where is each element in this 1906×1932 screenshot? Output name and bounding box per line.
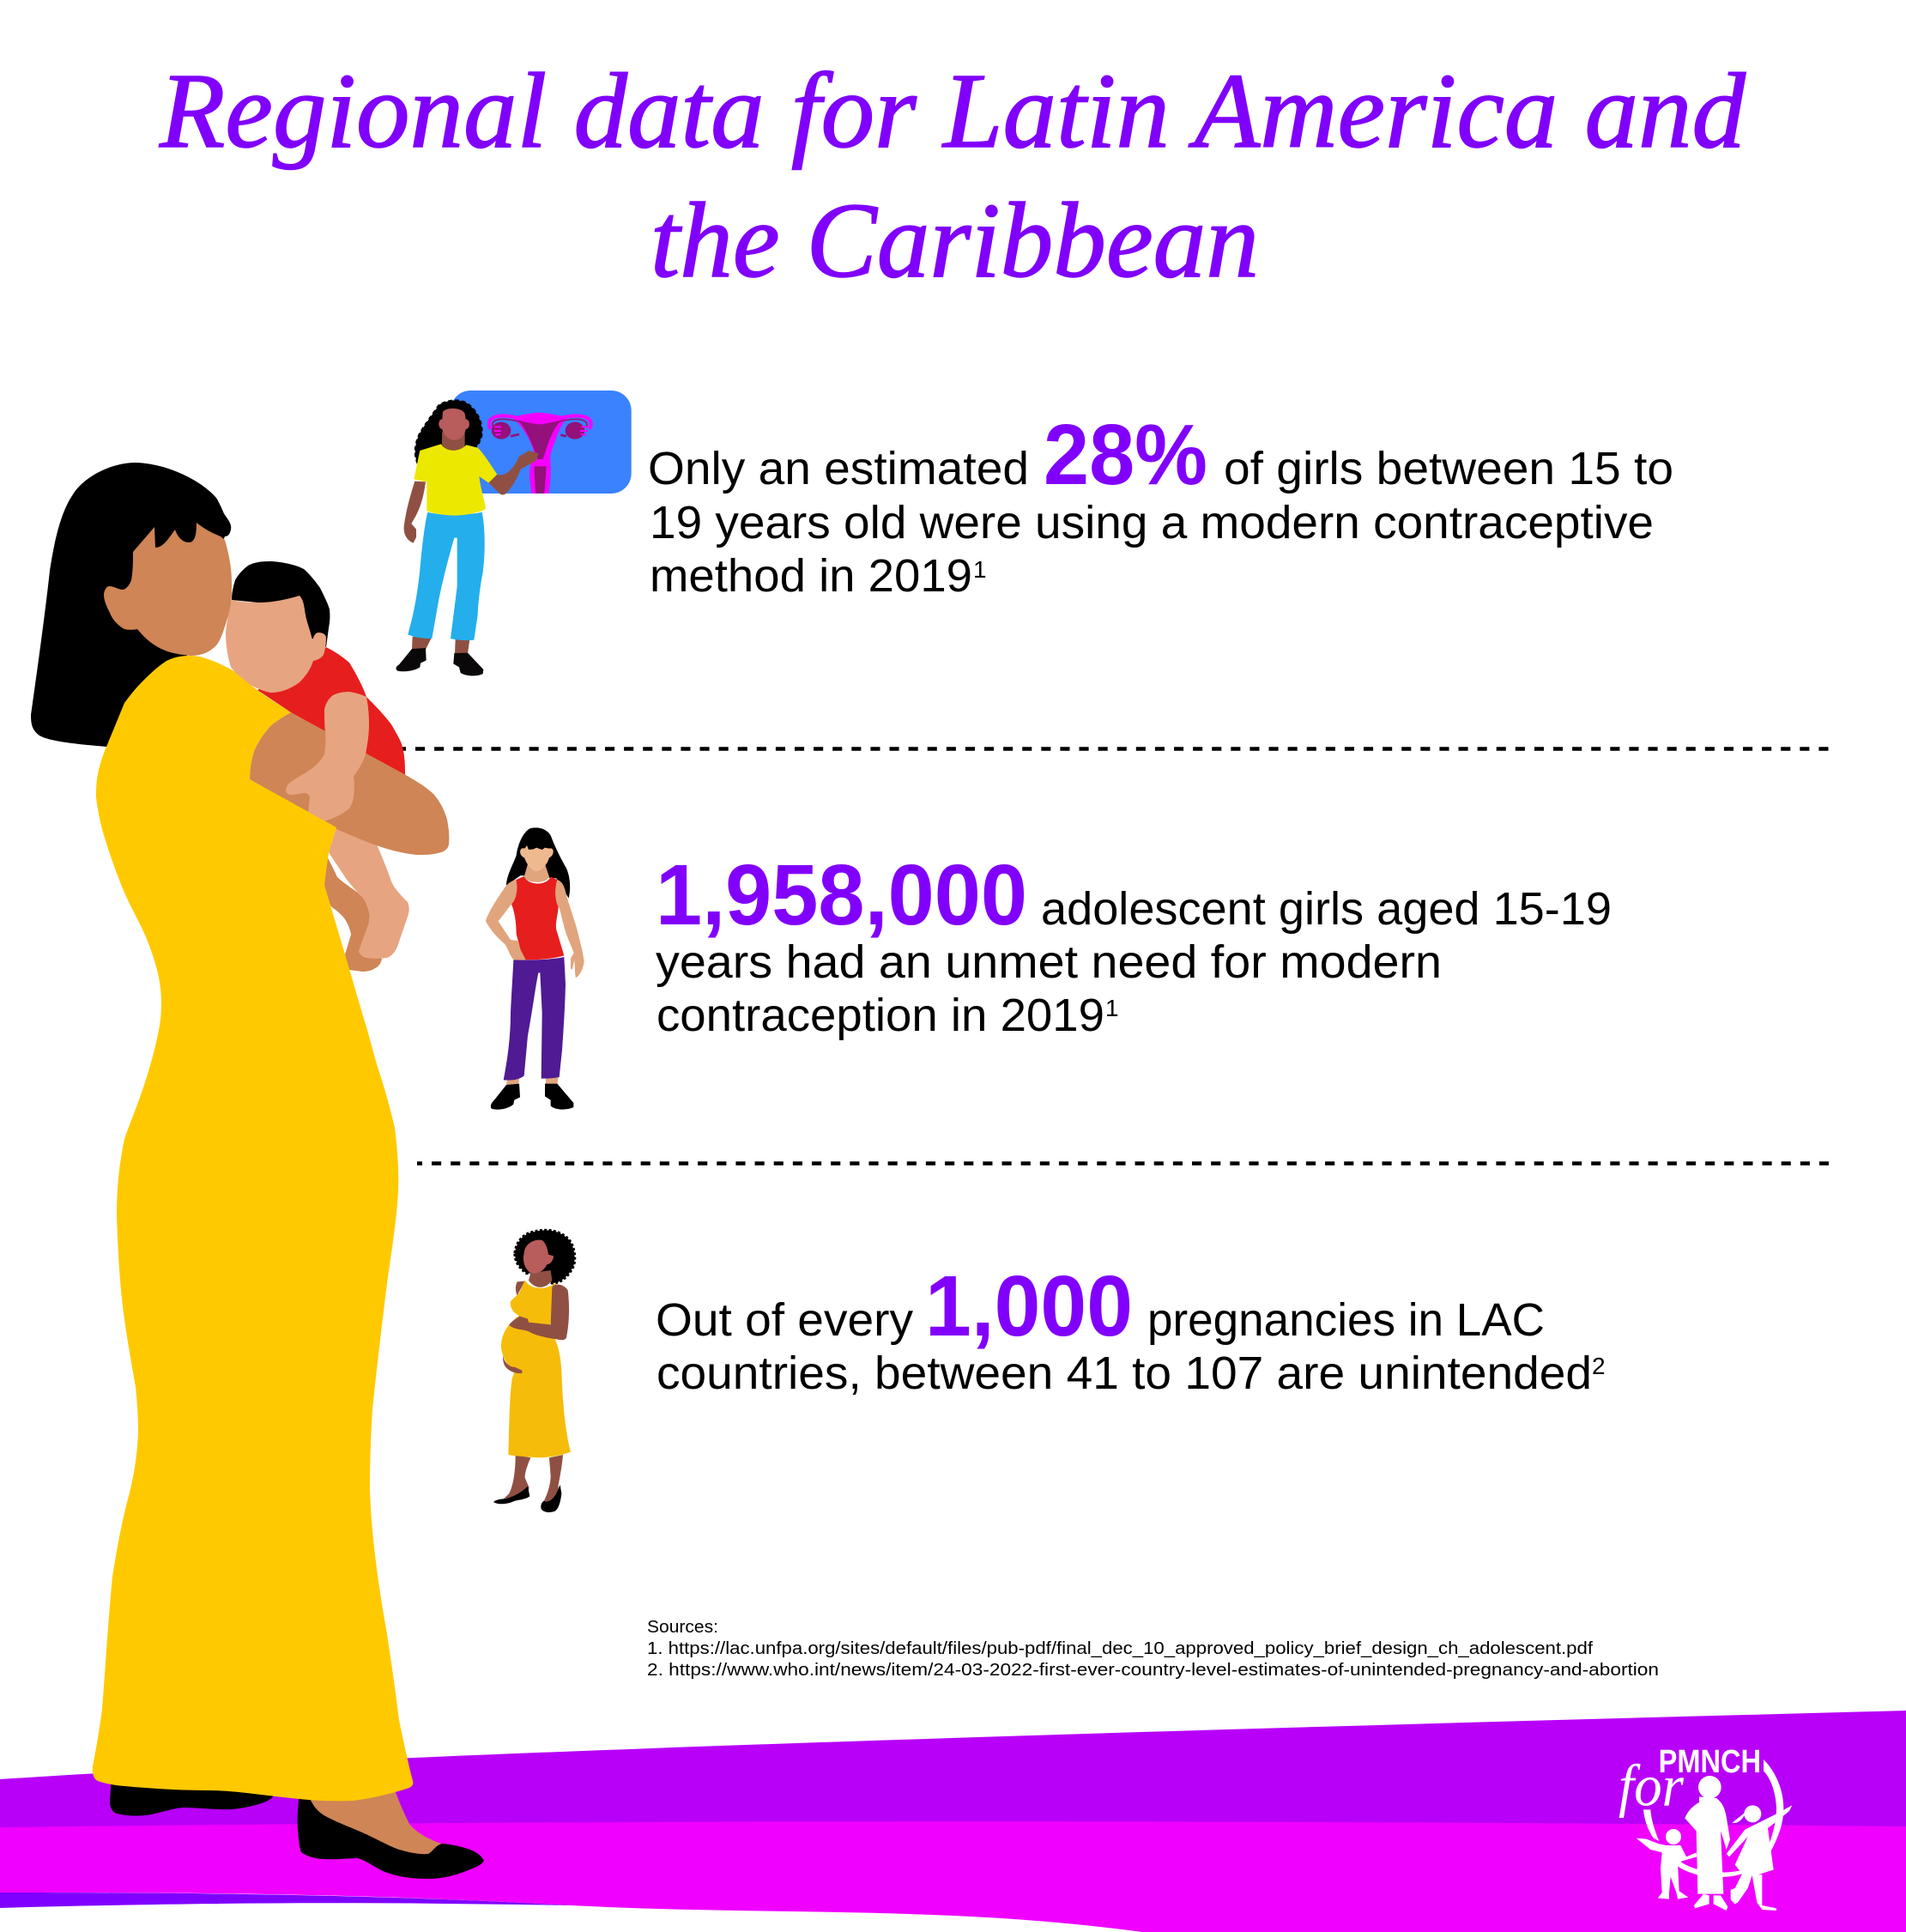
main illustration: mother holding baby <box>31 463 484 1879</box>
title: Regional data for Latin America and <box>159 52 1746 171</box>
title <box>159 52 1746 300</box>
woman figure <box>396 400 538 675</box>
background colour bands <box>0 1711 1906 1932</box>
statistic 1 text: 19 years old were using a modern contraceptive <box>650 497 1654 548</box>
baby legs <box>318 855 382 972</box>
baby face <box>226 596 326 693</box>
logo wordmark: for <box>1619 1753 1684 1818</box>
statistic 3 text: Out of every <box>656 1294 913 1346</box>
statistic 1 text: method in 2019 <box>650 550 972 602</box>
front foot and shoe <box>298 1790 484 1879</box>
mother hair <box>31 463 231 747</box>
back shoe <box>110 1777 276 1816</box>
PMNCH logo <box>1619 1743 1792 1911</box>
sources <box>647 1618 1659 1680</box>
statistic 1 text: of girls between 15 to <box>1224 443 1673 494</box>
statistic 3 text <box>656 1258 1606 1399</box>
dashed divider 1 <box>402 747 1829 751</box>
statistic 3 icon: pregnant woman <box>493 1230 575 1512</box>
logo wordmark: PMNCH <box>1659 1743 1761 1780</box>
logo ring <box>1643 1759 1783 1877</box>
mother face <box>104 523 232 656</box>
statistic 1 text <box>648 407 1673 602</box>
statistic 2 icon: woman in red top <box>486 827 584 1110</box>
big number: 1,958,000: 1,958,000 <box>656 847 1027 943</box>
statistic 2 text: 1 <box>1105 995 1119 1021</box>
title: the Caribbean <box>650 182 1259 300</box>
baby shirt <box>257 647 405 776</box>
mother dress <box>93 656 413 1801</box>
dashed divider 2 <box>417 1161 1829 1166</box>
statistic 1 text: Only an estimated <box>648 443 1029 494</box>
statistic 2 text <box>656 847 1612 1041</box>
baby arm <box>286 692 369 824</box>
statistic 2 text: contraception in 2019 <box>657 990 1104 1041</box>
logo figures: mother and two children <box>1637 1776 1792 1911</box>
uterus diagram <box>489 413 591 494</box>
logo wordmark <box>1619 1743 1761 1818</box>
big number: 28%: 28% <box>1044 407 1207 503</box>
mother arm <box>250 712 449 855</box>
statistic 3 text: pregnancies in LAC <box>1147 1294 1545 1346</box>
statistic 1 text: 1 <box>973 556 987 583</box>
statistic 3 text: countries, between 41 to 107 are unintended <box>657 1348 1592 1399</box>
blue diagram panel <box>451 391 632 494</box>
sources: 1. https://lac.unfpa.org/sites/default/files/pub-pdf/final_dec_10_approved_policy_brief_design_ch_adolescent.pdf <box>647 1639 1593 1658</box>
statistic 1 icon: woman with uterus diagram <box>396 391 632 675</box>
sources: Sources: <box>647 1618 718 1637</box>
statistic 3 text: 2 <box>1592 1353 1606 1379</box>
statistic 2 text: adolescent girls aged 15-19 <box>1041 883 1612 935</box>
baby hair <box>232 561 330 647</box>
statistic 2 text: years had an unmet need for modern <box>656 936 1442 988</box>
sources: 2. https://www.who.int/news/item/24-03-2022-first-ever-country-level-estimates-of-unintended-pregnancy-and-abortion <box>647 1661 1659 1680</box>
big number: 1,000: 1,000 <box>925 1258 1133 1354</box>
